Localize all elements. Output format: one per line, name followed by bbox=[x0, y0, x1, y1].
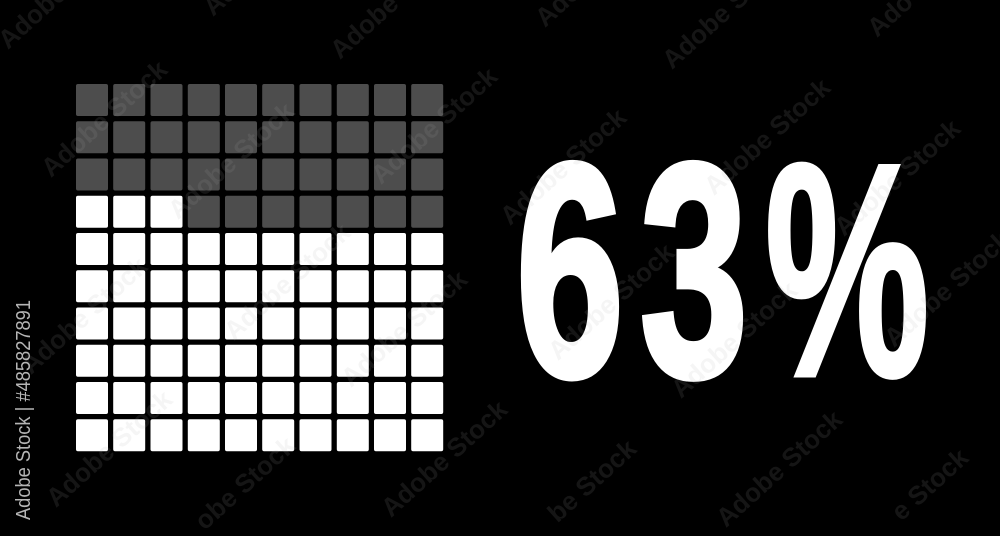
watermark: repeated diagonal stock text: Adobe Stock bbox=[365, 61, 503, 190]
watermark: repeated diagonal stock text: Adobe Stock bbox=[35, 54, 173, 183]
digit 3: 3 bbox=[640, 101, 748, 439]
watermark: repeated diagonal stock text: Adobe Stock bbox=[698, 72, 836, 201]
watermark: repeated diagonal stock text: Adobe Stock bbox=[542, 237, 680, 366]
filled squares bbox=[76, 196, 443, 451]
digit 6: 6 bbox=[516, 101, 624, 439]
unfilled squares bbox=[76, 84, 443, 228]
stock id vertical caption: Adobe Stock | #485827891 bbox=[13, 300, 35, 520]
percent sign: % bbox=[765, 102, 929, 440]
watermark: repeated diagonal stock text: Adobe Stock bbox=[40, 384, 178, 513]
waffle chart: 63 of 100 squares filled bbox=[76, 84, 443, 451]
watermark: repeated diagonal stock text: obe Stock bbox=[189, 430, 301, 536]
watermark: repeated diagonal stock text: Adobe Stock bbox=[665, 275, 803, 404]
watermark: repeated diagonal stock text: Adobe Stock bbox=[218, 217, 356, 346]
watermark: repeated diagonal stock text: Adobe Stock bbox=[494, 102, 632, 231]
watermark: repeated diagonal stock text: e Stock bbox=[885, 442, 974, 526]
watermark: repeated diagonal stock text: Adobe Stock bbox=[335, 264, 473, 393]
watermark: repeated diagonal stock text: Adobe Stock bbox=[828, 113, 966, 242]
watermark: repeated diagonal stock text: Adobe Stock bbox=[710, 404, 848, 533]
watermark: repeated diagonal stock text: Adobe Stock bbox=[162, 96, 300, 225]
percentage value: 63% bbox=[516, 101, 929, 440]
watermark: repeated diagonal stock text: be Stock bbox=[541, 433, 642, 528]
watermark: repeated diagonal stock text: Adobe Stock bbox=[15, 251, 153, 380]
watermark: repeated diagonal stock text: Adobe Stock bbox=[375, 394, 513, 523]
